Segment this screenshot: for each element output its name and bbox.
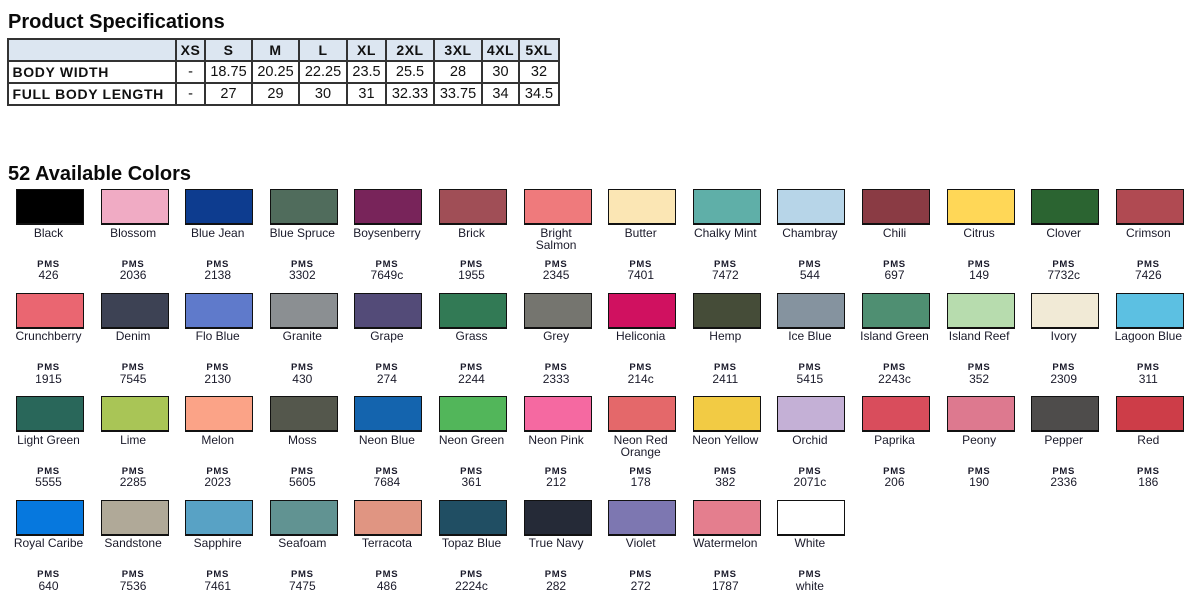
color: Royal Caribe: 640 xyxy=(38,578,59,592)
color: Royal Caribe xyxy=(8,500,92,603)
table: size specifications: 27 xyxy=(220,86,237,102)
color: Neon Red Orange: 178 xyxy=(631,475,651,489)
color: Neon Blue: Neon Blue xyxy=(359,432,415,446)
color: Heliconia: PMS xyxy=(629,362,652,373)
color: Neon Green: Neon Green xyxy=(439,432,504,446)
color: Crunchberry: 1915 xyxy=(35,372,62,386)
color: Topaz Blue: Topaz Blue xyxy=(442,536,501,550)
color: Grass xyxy=(439,293,507,386)
color: Neon Yellow: PMS xyxy=(714,466,737,476)
color: Moss: PMS xyxy=(291,466,314,476)
color: Neon Green: PMS xyxy=(460,466,483,476)
table: size specifications: 33.75 xyxy=(440,86,476,102)
table: size specifications: FULL BODY LENGTH xyxy=(12,86,164,102)
color: Lagoon Blue xyxy=(1115,293,1184,386)
color: Grey: Grey xyxy=(543,329,569,343)
color: Sapphire: PMS xyxy=(206,569,229,580)
color: Melon: 2023 xyxy=(204,475,231,489)
color: Ice Blue: Ice Blue xyxy=(788,329,832,343)
table: size specifications: 4XL xyxy=(487,42,514,58)
table: size specifications: XS xyxy=(181,42,200,58)
color: Citrus: 149 xyxy=(969,268,989,282)
color: Topaz Blue xyxy=(432,500,516,603)
color: Grape: PMS xyxy=(376,362,398,373)
color: Blue Jean: Blue Jean xyxy=(191,226,244,240)
color: Blue Spruce xyxy=(270,189,338,282)
table: size specifications: 30 xyxy=(315,86,331,102)
color: Lagoon Blue: 311 xyxy=(1139,372,1158,386)
color: Sandstone xyxy=(93,500,177,603)
color: Boysenberry: PMS xyxy=(376,258,398,270)
color: Red: 186 xyxy=(1138,475,1158,489)
color: Pepper xyxy=(1024,396,1108,500)
color: Neon Pink: 212 xyxy=(546,475,566,489)
color: Peony: 190 xyxy=(969,475,989,489)
table: size specifications: 18.75 xyxy=(210,64,247,80)
color: Grape xyxy=(354,293,422,386)
table: size specifications: 20.25 xyxy=(257,64,294,80)
color: Granite xyxy=(270,293,338,386)
color: Citrus: Citrus xyxy=(963,226,995,240)
color: Neon Green: 361 xyxy=(461,475,482,489)
color: Light Green: 5555 xyxy=(35,475,62,489)
color: Flo Blue: PMS xyxy=(206,362,229,373)
color: Orchid: PMS xyxy=(799,466,821,476)
color: Blue Spruce: 3302 xyxy=(289,268,316,282)
color: Island Reef: 352 xyxy=(969,372,989,386)
color: Island Reef xyxy=(947,293,1015,386)
color: Seafoam xyxy=(262,500,346,603)
color: Butter: Butter xyxy=(625,226,657,240)
color: Grass: Grass xyxy=(455,329,488,343)
color: Boysenberry: Boysenberry xyxy=(353,226,421,240)
color: Granite: Granite xyxy=(283,329,322,343)
table: size specifications: 31 xyxy=(358,86,375,102)
color: Chambray: 544 xyxy=(800,268,820,282)
table: size specifications: XL xyxy=(357,42,376,58)
color: Island Green: 2243c xyxy=(878,372,911,386)
color: Moss: 5605 xyxy=(289,475,316,489)
color: Neon Red Orange: PMS xyxy=(629,466,652,476)
color: Watermelon: 1787 xyxy=(712,578,739,592)
color: Blue Jean xyxy=(185,189,253,282)
color: Royal Caribe: PMS xyxy=(37,569,60,580)
color: Neon Blue: 7684 xyxy=(374,475,400,489)
color: Hemp: Hemp xyxy=(709,329,741,343)
color: Blossom: 2036 xyxy=(120,268,146,282)
color: Neon Pink: Neon Pink xyxy=(528,432,584,446)
color: Terracota: PMS xyxy=(376,569,398,580)
color: Paprika: PMS xyxy=(883,466,906,476)
color: Black: Black xyxy=(34,226,63,240)
color: Orchid xyxy=(777,396,845,489)
color: Light Green xyxy=(16,396,84,489)
color: Moss xyxy=(270,396,338,489)
color: Chili: PMS xyxy=(883,258,906,270)
color: Denim xyxy=(101,293,169,386)
color: Sandstone: PMS xyxy=(122,569,144,580)
color: Watermelon xyxy=(685,500,769,603)
color: Blossom xyxy=(101,189,169,282)
color: Neon Red Orange xyxy=(608,396,676,489)
color: Grass: PMS xyxy=(460,362,483,373)
color: Clover xyxy=(1031,189,1099,282)
color: Watermelon: Watermelon xyxy=(693,536,757,550)
color: True Navy xyxy=(516,500,600,603)
color: Melon: PMS xyxy=(206,466,229,476)
table: size specifications: 29 xyxy=(267,86,284,102)
color: Neon Blue xyxy=(354,396,422,489)
color: Terracota xyxy=(347,500,431,603)
color: Bright Salmon: Salmon xyxy=(536,238,576,252)
color: Terracota: Terracota xyxy=(362,536,412,550)
color: Ivory: Ivory xyxy=(1051,329,1077,343)
color: Neon Yellow xyxy=(692,396,761,489)
color: Chalky Mint xyxy=(693,189,761,282)
color: Neon Yellow: 382 xyxy=(715,475,735,489)
color: Grey xyxy=(524,293,592,386)
color: Topaz Blue: 2224c xyxy=(455,578,488,592)
table: size specifications: - xyxy=(188,64,193,80)
color: Blossom: PMS xyxy=(122,258,144,270)
color: Clover: Clover xyxy=(1046,226,1081,240)
color: Seafoam: PMS xyxy=(291,569,314,580)
color: Bright Salmon: Bright xyxy=(540,226,572,240)
color: True Navy: PMS xyxy=(545,569,567,580)
color: Chambray xyxy=(777,189,845,282)
color: Clover: 7732c xyxy=(1047,268,1080,282)
color: Grape: Grape xyxy=(370,329,404,343)
color: Brick: PMS xyxy=(460,258,483,270)
color: Neon Yellow: Neon Yellow xyxy=(692,432,758,446)
color: Orchid: 2071c xyxy=(794,475,826,489)
color: Sandstone: Sandstone xyxy=(104,536,162,550)
color: Granite: 430 xyxy=(292,372,312,386)
color: Neon Blue: PMS xyxy=(376,466,398,476)
color: Neon Pink xyxy=(524,396,592,489)
color: Citrus: PMS xyxy=(968,258,990,270)
table: size specifications: 23.5 xyxy=(352,64,381,80)
color: Light Green: Light Green xyxy=(17,432,80,446)
table: size specifications: L xyxy=(318,42,328,58)
color: Crimson: 7426 xyxy=(1135,268,1162,282)
color: Peony: PMS xyxy=(968,466,990,476)
table: size specifications: 5XL xyxy=(525,42,553,58)
color: Paprika: Paprika xyxy=(874,432,915,446)
color: Melon: Melon xyxy=(201,432,234,446)
color: Island Reef: PMS xyxy=(968,362,990,373)
color: Boysenberry: 7649c xyxy=(371,268,403,282)
table: size specifications: 25.5 xyxy=(396,64,424,80)
color: Neon Red Orange: Neon Red xyxy=(614,432,668,446)
table: size specifications xyxy=(7,38,560,106)
color: Paprika xyxy=(862,396,930,489)
color: Royal Caribe: Royal Caribe xyxy=(14,536,83,550)
color: Lime: PMS xyxy=(122,466,144,476)
color: Watermelon: PMS xyxy=(714,569,737,580)
color: Chalky Mint: PMS xyxy=(714,258,737,270)
color: Crimson: PMS xyxy=(1137,258,1160,270)
color: Citrus xyxy=(947,189,1015,282)
table: size specifications: 2XL xyxy=(396,42,424,58)
color: Flo Blue: 2130 xyxy=(204,372,231,386)
color: Brick: Brick xyxy=(458,226,485,240)
color: White: white xyxy=(796,578,824,592)
color: Topaz Blue: PMS xyxy=(460,569,483,580)
color: True Navy: 282 xyxy=(546,578,566,592)
color: Lime: 2285 xyxy=(120,475,146,489)
heading: product specifications: Product Specifications xyxy=(8,11,225,33)
color: Moss: Moss xyxy=(288,432,317,446)
table: size specifications: 32 xyxy=(531,64,547,80)
table: size specifications: 3XL xyxy=(444,42,472,58)
color: Pepper: PMS xyxy=(1052,466,1075,476)
color: Terracota: 486 xyxy=(377,578,397,592)
color: Lagoon Blue: Lagoon Blue xyxy=(1115,329,1182,343)
color: Blue Spruce: PMS xyxy=(291,258,314,270)
color: Ice Blue xyxy=(777,293,845,386)
color: Brick: 1955 xyxy=(458,268,485,282)
color: Light Green: PMS xyxy=(37,466,60,476)
color: Denim: Denim xyxy=(116,329,150,343)
color: Black: 426 xyxy=(38,268,59,282)
color: Red: Red xyxy=(1137,432,1159,446)
color: Denim: 7545 xyxy=(120,372,146,386)
color: Bright Salmon: PMS xyxy=(545,258,567,270)
color: Sapphire: Sapphire xyxy=(194,536,242,550)
table: size specifications: M xyxy=(269,42,282,58)
color: Red: PMS xyxy=(1137,466,1160,476)
color: Sandstone: 7536 xyxy=(120,578,146,592)
color: Chili xyxy=(862,189,930,282)
color: Grey: PMS xyxy=(545,362,567,373)
color: Ivory xyxy=(1031,293,1099,386)
color: Boysenberry xyxy=(353,189,422,282)
color: Island Green: Island Green xyxy=(860,329,929,343)
color: Violet: 272 xyxy=(631,578,651,592)
table: size specifications: S xyxy=(224,42,233,58)
table: size specifications: 34.5 xyxy=(525,86,553,102)
color: Chili: 697 xyxy=(884,268,905,282)
color: Sapphire xyxy=(178,500,262,603)
color: Hemp: PMS xyxy=(714,362,737,373)
color: Bright Salmon xyxy=(524,189,592,282)
color: Neon Red Orange: Orange xyxy=(621,445,661,459)
color: Grass: 2244 xyxy=(458,372,485,386)
color: Granite: PMS xyxy=(291,362,314,373)
color: Crimson xyxy=(1116,189,1184,282)
color: Brick xyxy=(439,189,507,282)
color: Neon Green xyxy=(439,396,507,489)
color: Butter xyxy=(608,189,676,282)
color: Island Reef: Island Reef xyxy=(949,329,1009,343)
color: White xyxy=(770,500,854,603)
color: Peony xyxy=(939,396,1023,500)
color: Seafoam: Seafoam xyxy=(278,536,326,550)
color: Black: PMS xyxy=(37,258,60,270)
color: Violet: Violet xyxy=(626,536,656,550)
color: Butter: PMS xyxy=(629,258,652,270)
color: Seafoam: 7475 xyxy=(289,578,316,592)
color: Blue Spruce: Blue Spruce xyxy=(270,226,335,240)
color: Heliconia: 214c xyxy=(628,372,654,386)
color: Crunchberry xyxy=(15,293,84,386)
color: Pepper: 2336 xyxy=(1050,475,1077,489)
color: Island Green xyxy=(860,293,930,386)
color: Blossom: Blossom xyxy=(110,226,156,240)
table: size specifications: 34 xyxy=(492,86,509,102)
color: Crunchberry: Crunchberry xyxy=(15,329,82,343)
color: Red xyxy=(1108,396,1192,500)
color: Orchid: Orchid xyxy=(792,432,828,446)
color: Island Green: PMS xyxy=(883,362,906,373)
color: Sapphire: 7461 xyxy=(204,578,231,592)
color: Melon xyxy=(185,396,253,489)
color: Ice Blue: 5415 xyxy=(797,372,823,386)
color: Crimson: Crimson xyxy=(1126,226,1171,240)
color: Chambray: PMS xyxy=(799,258,821,270)
color: Chalky Mint: Chalky Mint xyxy=(694,226,757,240)
color: Violet xyxy=(601,500,685,603)
color: Lagoon Blue: PMS xyxy=(1137,362,1160,373)
color: Lime: Lime xyxy=(120,432,146,446)
color: Ice Blue: PMS xyxy=(799,362,821,373)
table: size specifications: - xyxy=(188,86,193,102)
color: Butter: 7401 xyxy=(627,268,654,282)
color: Chambray: Chambray xyxy=(782,226,838,240)
color: Crunchberry: PMS xyxy=(37,362,60,373)
color: Bright Salmon: 2345 xyxy=(543,268,569,282)
color: Hemp: 2411 xyxy=(712,372,738,386)
color: Chili: Chili xyxy=(883,226,906,240)
table: size specifications: 32.33 xyxy=(392,86,428,102)
color: Blue Jean: 2138 xyxy=(204,268,231,282)
color: Chalky Mint: 7472 xyxy=(712,268,739,282)
color: Heliconia: Heliconia xyxy=(616,329,665,343)
color: Heliconia xyxy=(608,293,676,386)
color: Paprika: 206 xyxy=(884,475,905,489)
color: Lime xyxy=(101,396,169,489)
color: White: PMS xyxy=(799,569,821,580)
color: Peony: Peony xyxy=(962,432,996,446)
color: White: White xyxy=(795,536,825,550)
color: Neon Pink: PMS xyxy=(545,466,567,476)
color: Flo Blue xyxy=(185,293,253,386)
color: Pepper: Pepper xyxy=(1044,432,1083,446)
color: Flo Blue: Flo Blue xyxy=(196,329,240,343)
table: size specifications: 28 xyxy=(450,64,466,80)
color: Hemp xyxy=(693,293,761,386)
table: size specifications: 22.25 xyxy=(305,64,341,80)
color: Ivory: PMS xyxy=(1052,362,1075,373)
color: Denim: PMS xyxy=(122,362,144,373)
table: size specifications: BODY WIDTH xyxy=(12,64,109,80)
color: Violet: PMS xyxy=(629,569,652,580)
color: Black xyxy=(16,189,84,282)
table: size specifications: 30 xyxy=(492,64,509,80)
color: Blue Jean: PMS xyxy=(206,258,229,270)
heading: available colors: 52 Available Colors xyxy=(8,163,191,185)
color: Ivory: 2309 xyxy=(1050,372,1077,386)
color: True Navy: True Navy xyxy=(529,536,584,550)
color: Grey: 2333 xyxy=(543,372,569,386)
color: Grape: 274 xyxy=(377,372,397,386)
color: Clover: PMS xyxy=(1052,258,1075,270)
